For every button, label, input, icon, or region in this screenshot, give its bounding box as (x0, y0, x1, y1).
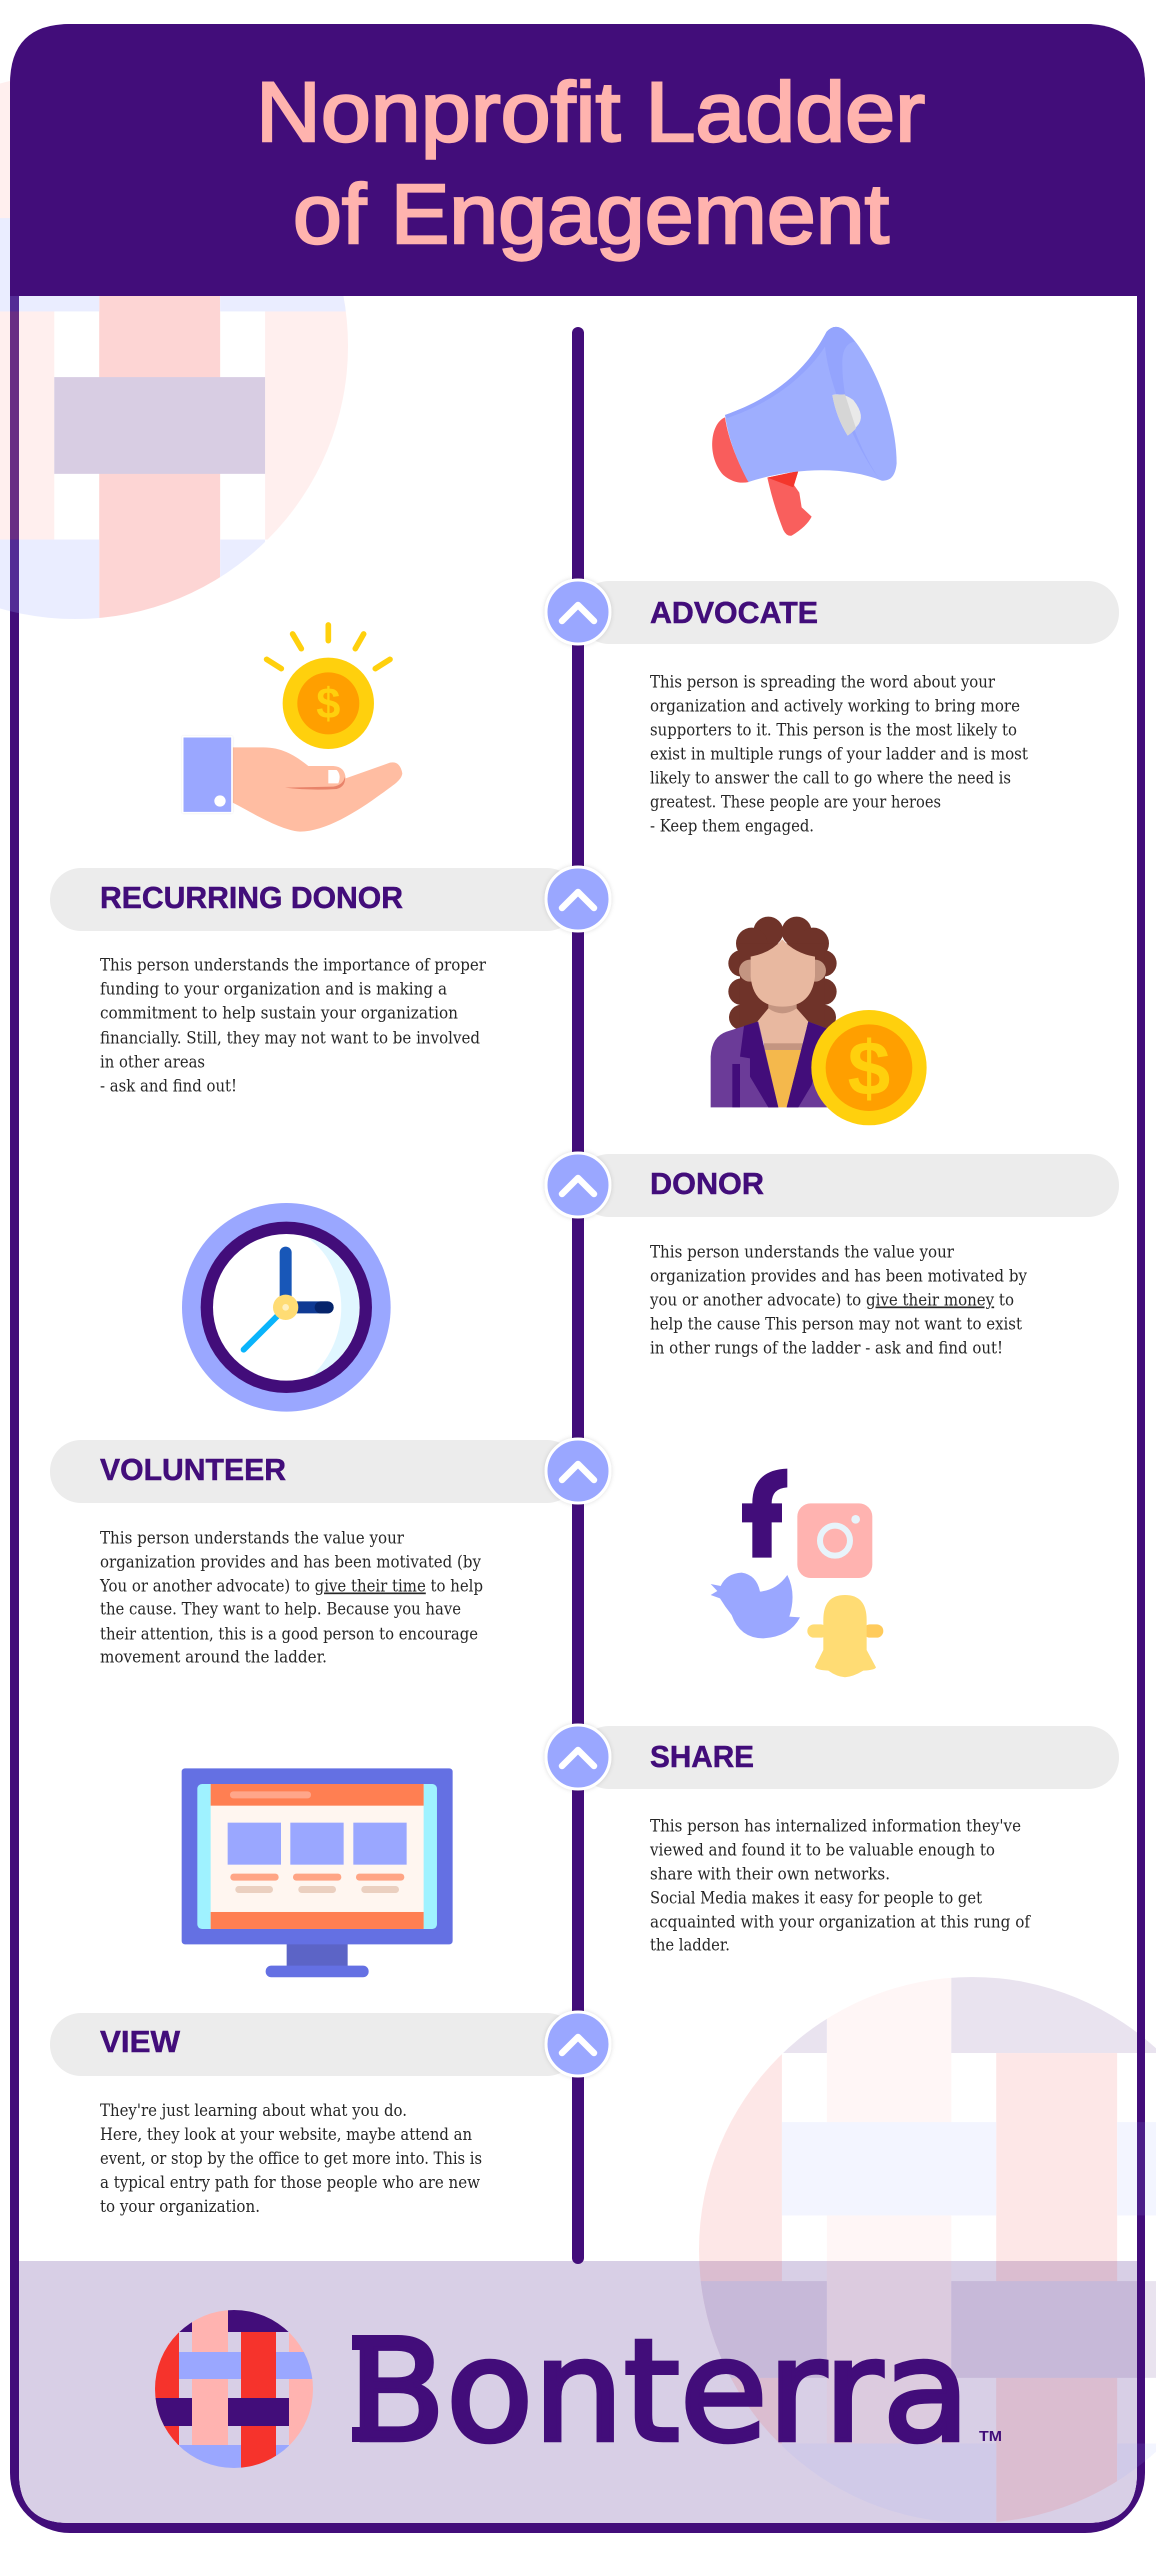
text: recurring donor: in other areas (100, 1052, 205, 1072)
rung: recurring donor (50, 867, 610, 1096)
pill heading: donor (578, 1154, 1119, 1217)
icon: woman donor with coin: $ (848, 1027, 890, 1112)
pill heading: donor: DONOR (650, 1166, 764, 1201)
text: view: to your organization. (100, 2197, 260, 2217)
wordmark: Bonterra (348, 2310, 970, 2474)
pill heading: view: VIEW (100, 2024, 181, 2059)
text: advocate: - Keep them engaged. (650, 816, 814, 836)
facebook (742, 1469, 787, 1558)
text: advocate: likely to answer the call to go where the need is (650, 768, 1011, 788)
chevron badge: recurring donor (546, 867, 610, 931)
pill heading: advocate: ADVOCATE (650, 595, 818, 630)
icon: hand with coin: $ (316, 680, 340, 728)
text: volunteer: organization provides and has been motivated (by (100, 1552, 481, 1572)
pill heading: advocate (578, 581, 1119, 644)
text: donor: This person understands the value your (650, 1242, 955, 1262)
text: donor: organization provides and has been motivated by (650, 1266, 1027, 1286)
footer logo (155, 2310, 1002, 2474)
text: donor: help the cause This person may not want to exist (650, 1314, 1022, 1334)
decorative woven circle: top left (0, 73, 348, 619)
title: of Engagement (293, 167, 889, 261)
text: share (649, 1816, 1032, 1956)
text: volunteer (99, 1528, 483, 1668)
text: volunteer: movement around the ladder. (100, 1648, 327, 1668)
pill heading: recurring donor (50, 868, 578, 931)
text: recurring donor: This person understands the importance of proper (100, 956, 487, 976)
text: view: They're just learning about what you do. (100, 2101, 407, 2121)
text: recurring donor: funding to your organization and is making a (100, 980, 447, 1000)
chevron badge: advocate (546, 580, 610, 644)
text: advocate: greatest. These people are your heroes (650, 792, 941, 812)
rung: share (546, 1725, 1119, 1956)
text: donor: you or another advocate) to give their money to (649, 1290, 1014, 1310)
instagram (797, 1503, 872, 1578)
pill heading: share (578, 1726, 1119, 1789)
footer band (19, 2261, 1137, 2523)
icon: woman donor with coin (711, 917, 927, 1125)
text: donor (649, 1242, 1027, 1358)
text: volunteer: their attention, this is a good person to encourage (100, 1624, 478, 1644)
text: view: event, or stop by the office to get more into. This is (100, 2149, 482, 2169)
text: advocate: exist in multiple rungs of your ladder and is most (650, 744, 1028, 764)
text: advocate: supporters to it. This person is the most likely to (650, 720, 1017, 740)
chevron badge: share (546, 1725, 610, 1789)
text: share: the ladder. (650, 1936, 730, 1956)
text: volunteer: the cause. They want to help. Because you have (100, 1600, 461, 1620)
pill heading: share: SHARE (650, 1739, 754, 1774)
pill heading: volunteer: VOLUNTEER (100, 1452, 286, 1487)
rung: view (50, 2012, 610, 2217)
trademark: TM (979, 2428, 1002, 2445)
logo mark (155, 2310, 313, 2468)
pill heading: volunteer (50, 1440, 578, 1503)
title (256, 65, 925, 261)
chevron badge: donor (546, 1153, 610, 1217)
text: share: viewed and found it to be valuable enough to (649, 1840, 995, 1860)
icon: hand with coin (183, 625, 402, 832)
text: recurring donor: - ask and find out! (100, 1076, 237, 1096)
text: donor: in other rungs of the ladder - ask and find out! (650, 1338, 1003, 1358)
pill heading: view (50, 2013, 578, 2076)
text: volunteer: This person understands the value your (100, 1528, 405, 1548)
text: recurring donor: commitment to help sustain your organization (100, 1004, 458, 1024)
text: share: Social Media makes it easy for people to get (650, 1888, 982, 1908)
icon: megaphone (712, 327, 897, 536)
ladder spine (572, 327, 584, 2264)
rung: volunteer (50, 1439, 610, 1668)
text: recurring donor (100, 956, 487, 1096)
text: advocate (650, 672, 1028, 836)
rung: advocate (546, 580, 1119, 836)
text: view: Here, they look at your website, maybe attend an (100, 2125, 472, 2145)
text: view: a typical entry path for those people who are new (100, 2173, 480, 2193)
header banner (10, 24, 1145, 296)
snapchat (807, 1595, 883, 1677)
icon: desktop monitor (182, 1768, 453, 1977)
icon: social media (711, 1469, 883, 1677)
text: volunteer: You or another advocate) to give their time to help (99, 1576, 483, 1596)
text: share: share with their own networks. (650, 1864, 890, 1884)
twitter (711, 1573, 800, 1638)
text: recurring donor: financially. Still, they may not want to be involved (100, 1028, 480, 1048)
icon: clock (182, 1203, 391, 1412)
text: advocate: organization and actively working to bring more (650, 696, 1020, 716)
pill heading: recurring donor: RECURRING DONOR (100, 880, 403, 915)
text: advocate: This person is spreading the word about your (650, 672, 996, 692)
text: share: This person has internalized information they've (650, 1816, 1021, 1836)
title: Nonprofit Ladder (256, 65, 925, 159)
rung: donor (546, 1153, 1119, 1358)
decorative woven circle: bottom right (699, 1977, 1156, 2523)
text: share: acquainted with your organization at this rung of (650, 1912, 1032, 1932)
chevron badge: volunteer (546, 1439, 610, 1503)
text: view (100, 2101, 482, 2217)
chevron badge: view (546, 2012, 610, 2076)
